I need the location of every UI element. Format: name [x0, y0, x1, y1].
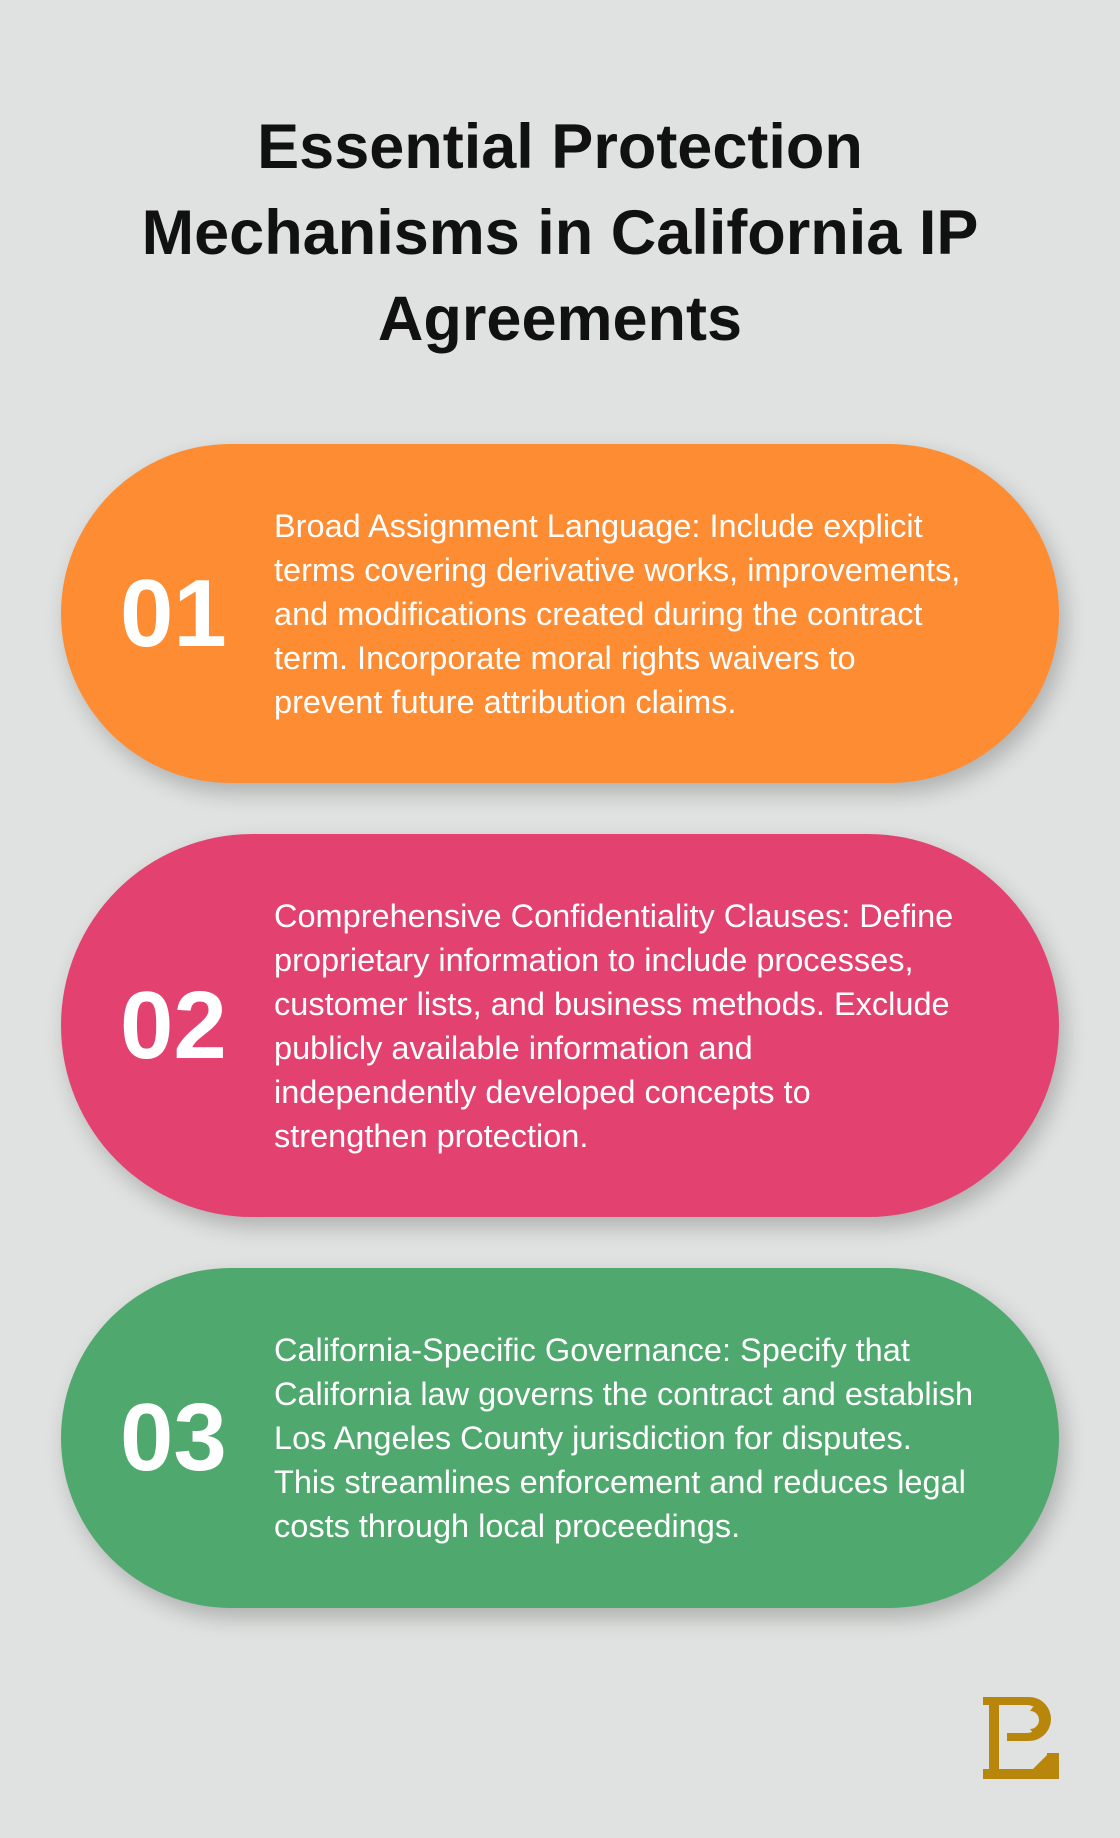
text 02: independently developed concepts to: [274, 1074, 811, 1110]
text 01: Broad Assignment Language: Include explicit: [274, 508, 923, 544]
title: Mechanisms in California IP: [142, 198, 978, 268]
panel: 03: [61, 1268, 1059, 1608]
text 02: publicly available information and: [274, 1030, 753, 1066]
number 02: 02: [120, 972, 227, 1078]
text 02: [274, 898, 953, 1154]
text 03: costs through local proceedings.: [274, 1508, 740, 1544]
text 03: Los Angeles County jurisdiction for disputes.: [274, 1420, 912, 1456]
text 03: California law governs the contract and establish: [274, 1376, 973, 1412]
panel: 02: [61, 834, 1059, 1217]
icon: logo: [983, 1697, 1059, 1779]
text 02: proprietary information to include processes,: [274, 942, 913, 978]
title: Essential Protection: [257, 112, 863, 182]
text 02: strengthen protection.: [274, 1118, 588, 1154]
text 03: This streamlines enforcement and reduces legal: [274, 1464, 966, 1500]
text 02: Comprehensive Confidentiality Clauses: Define: [274, 898, 953, 934]
text 01: term. Incorporate moral rights waivers to: [274, 640, 856, 676]
text 01: and modifications created during the contract: [274, 596, 923, 632]
title: Agreements: [378, 284, 742, 354]
text 03: [274, 1332, 973, 1544]
panel: 01: [61, 444, 1059, 783]
number 01: 01: [120, 560, 227, 666]
text 01: [274, 508, 960, 720]
number 03: 03: [120, 1384, 227, 1491]
text 01: terms covering derivative works, improvements,: [274, 552, 960, 588]
text 03: California-Specific Governance: Specify that: [274, 1332, 910, 1368]
text 02: customer lists, and business methods. Exclude: [274, 986, 950, 1022]
title: [142, 112, 978, 354]
text 01: prevent future attribution claims.: [274, 684, 736, 720]
